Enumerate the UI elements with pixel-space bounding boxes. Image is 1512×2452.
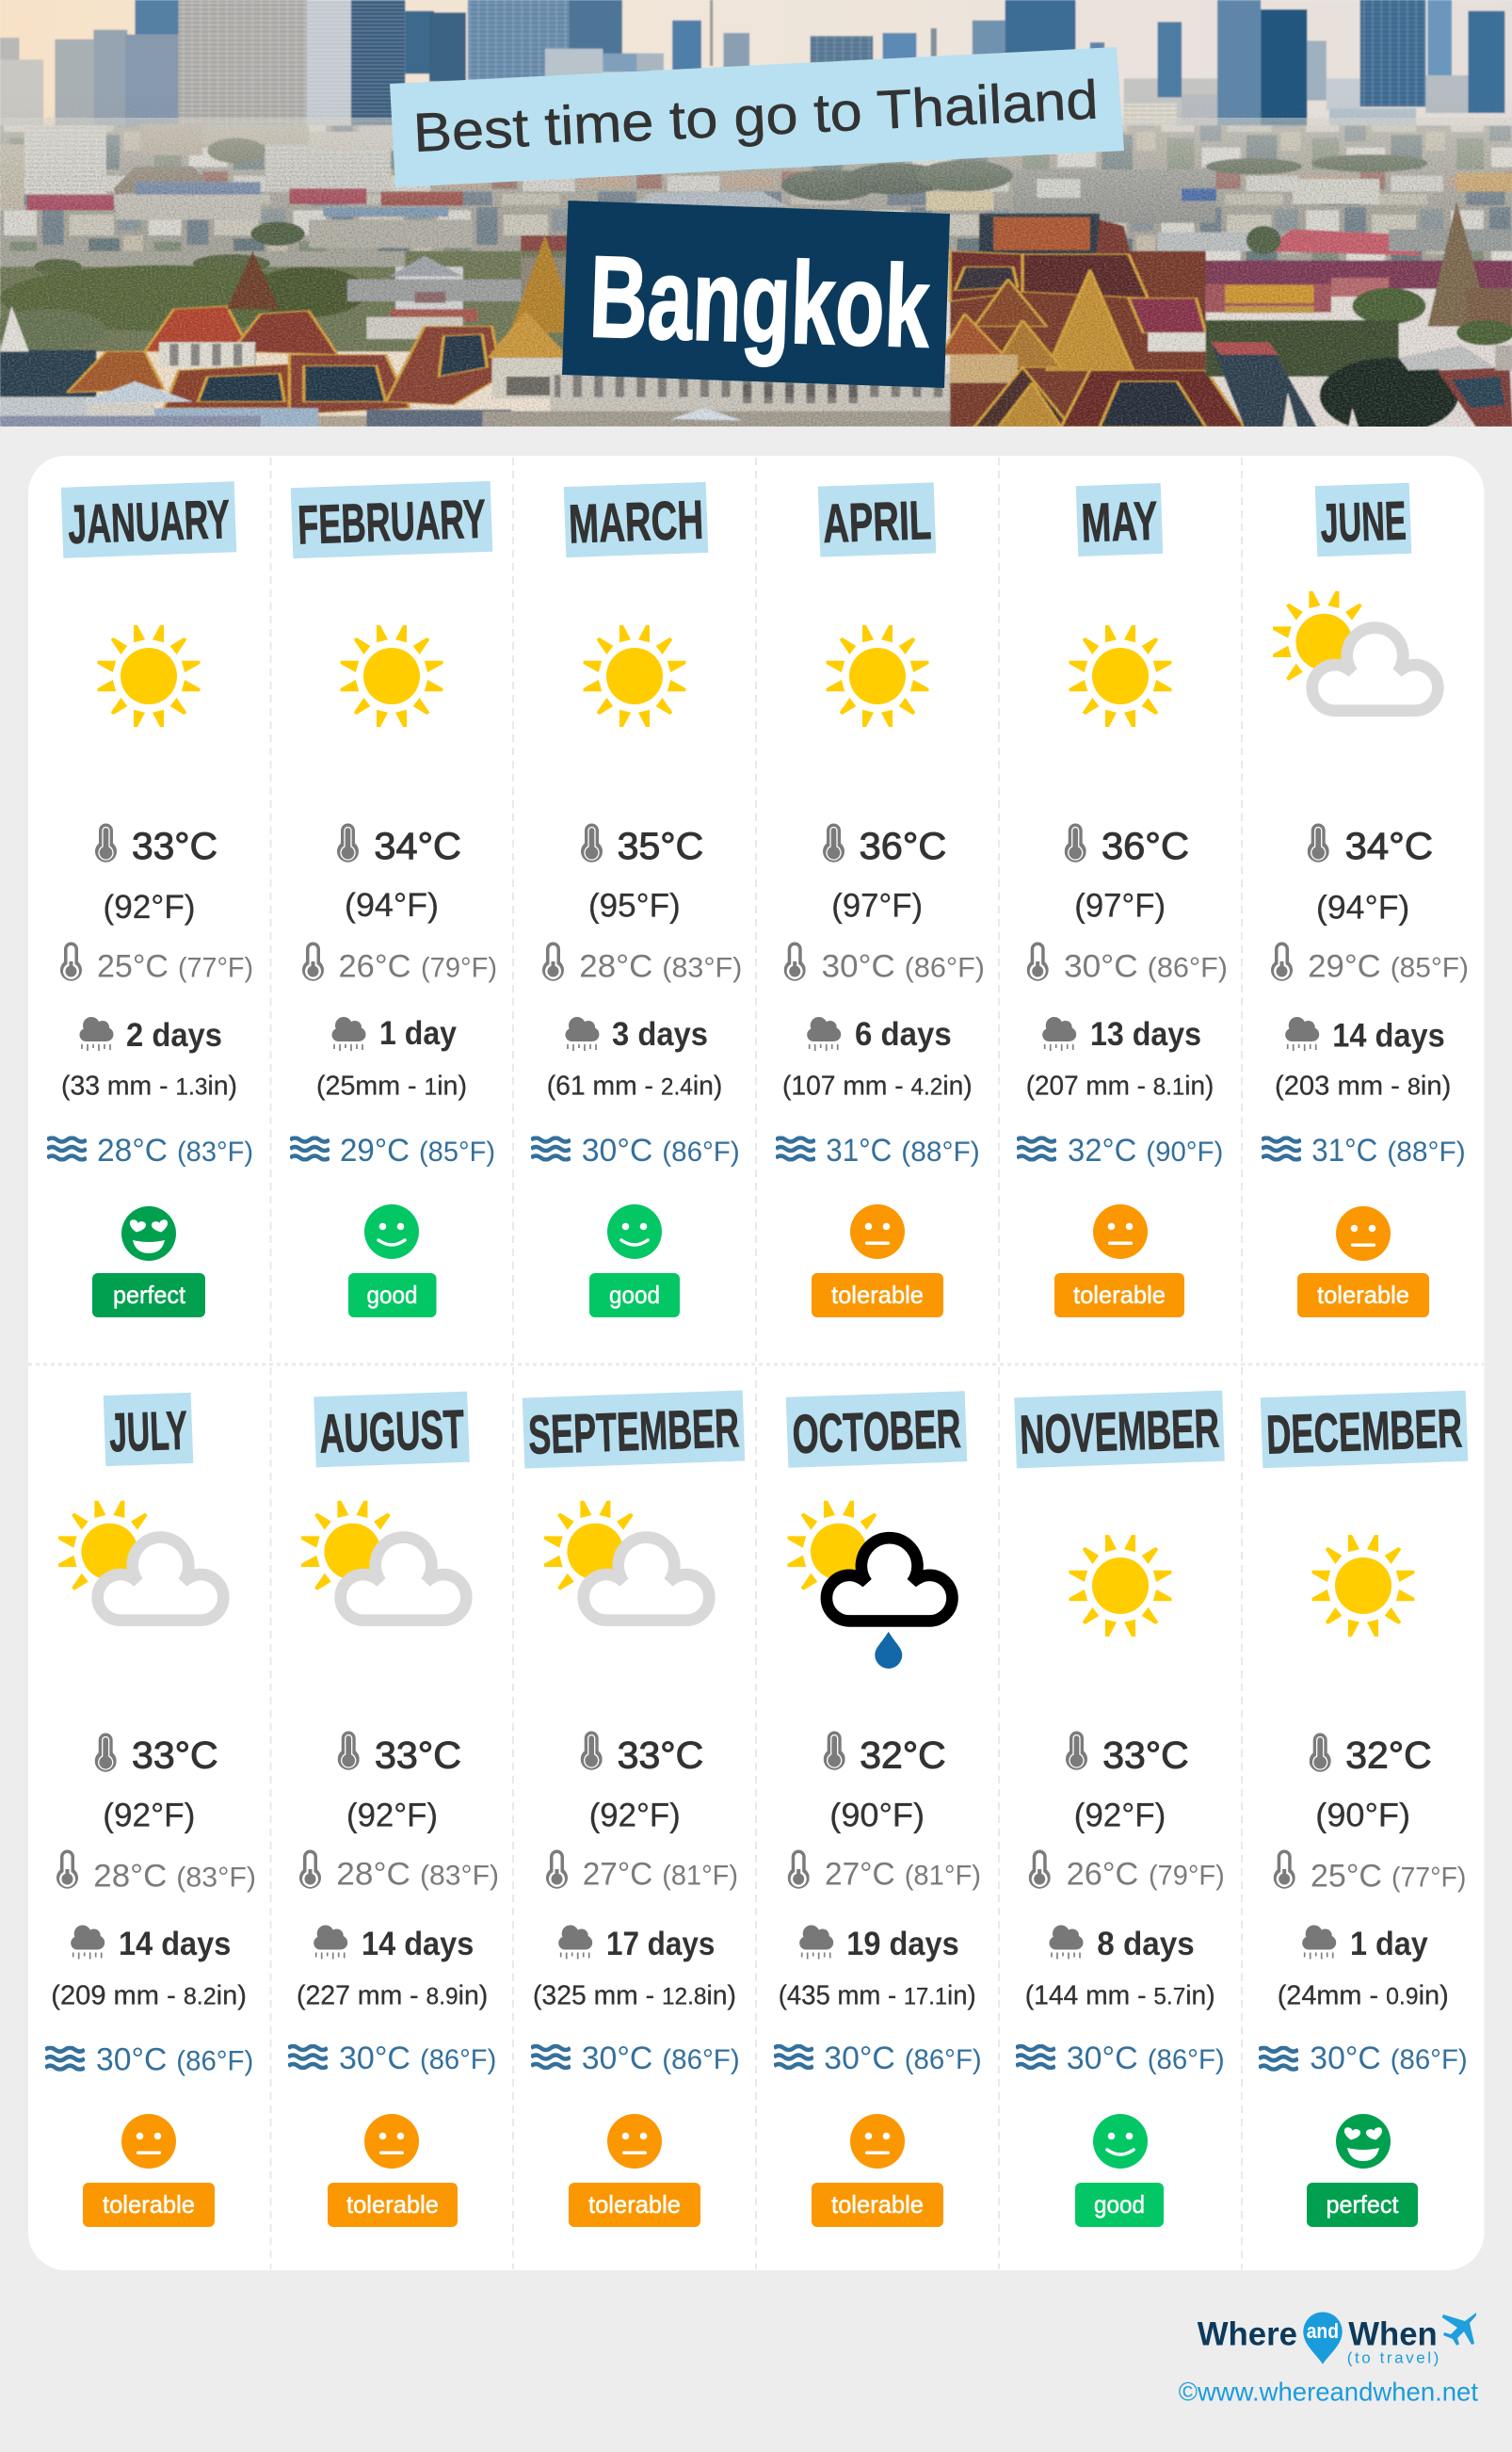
- rainy days: 14 days: [362, 1926, 474, 1962]
- rainfall: (24mm - 0.9in): [1278, 1980, 1449, 2010]
- icon: thermometer low: [299, 1849, 321, 1889]
- icon: rain: [1049, 1925, 1083, 1959]
- heading: April: APRIL: [822, 490, 932, 555]
- rating badge: tolerable: tolerable: [1073, 1281, 1166, 1309]
- icon: thermometer high: [581, 1731, 603, 1770]
- low temperature: 27°C: [583, 1857, 652, 1893]
- rating badge: tolerable: [812, 1273, 943, 1317]
- sea temperature: 30°C: [1310, 2041, 1381, 2076]
- sea temperature: [1067, 2041, 1225, 2076]
- rating badge: tolerable: [1054, 1273, 1184, 1317]
- sea temperature: (88°F): [901, 1137, 980, 1168]
- month: January: [47, 481, 253, 1317]
- high temperature: 36°C: [860, 826, 946, 867]
- icon: tolerable face: [1336, 1206, 1391, 1261]
- low temperature: 30°C: [1064, 949, 1138, 985]
- icon: thermometer low: [784, 942, 806, 981]
- rating badge: good: good: [367, 1281, 418, 1309]
- heading: February: [291, 481, 492, 558]
- sea temperature: [1068, 1133, 1223, 1169]
- low temperature: [1311, 1859, 1466, 1895]
- high temperature Fahrenheit: (90°F): [829, 1797, 925, 1833]
- rating badge: tolerable: [1297, 1273, 1429, 1317]
- rainy days: 3 days: [612, 1016, 708, 1053]
- icon: sea waves: [1262, 1137, 1301, 1160]
- icon: thermometer low: [1027, 942, 1049, 981]
- icon: rain: [79, 1017, 113, 1051]
- icon: good face: [607, 1204, 662, 1259]
- month: October: [774, 1391, 982, 2227]
- rainy days: 13 days: [1090, 1016, 1201, 1053]
- icon: sea waves: [1259, 2048, 1298, 2070]
- low temperature: 26°C: [1067, 1857, 1138, 1893]
- icon: thermometer high: [1308, 823, 1329, 863]
- website credit: ©www.whereandwhen.net: [1179, 2377, 1478, 2406]
- rating badge: perfect: [92, 1273, 205, 1317]
- sea temperature: [582, 1133, 740, 1169]
- icon: rain: [1302, 1925, 1336, 1959]
- low temperature: 29°C: [1308, 949, 1381, 985]
- icon: thermometer high: [1066, 1731, 1087, 1770]
- title label: Best time to go to Thailand: Best time to go to Thailand: [411, 69, 1100, 164]
- sea temperature: [1310, 2041, 1468, 2076]
- icon: sea waves: [531, 2046, 571, 2068]
- heading: October: OCTOBER: [792, 1398, 962, 1465]
- rainy days: 14 days: [119, 1926, 231, 1962]
- icon: tolerable face: [121, 2114, 176, 2169]
- low temperature: [97, 949, 253, 985]
- icon: thermometer low: [788, 1849, 810, 1889]
- sea temperature: 30°C: [96, 2042, 167, 2078]
- logo: Where and When (to travel): Where: [1198, 2316, 1297, 2353]
- sea temperature: 30°C: [582, 2041, 652, 2076]
- logo: Where and When (to travel): When: [1348, 2316, 1438, 2353]
- icon: map pin with and: [1303, 2312, 1343, 2364]
- icon: sunny: [98, 625, 200, 727]
- rating badge: tolerable: [569, 2183, 700, 2227]
- low temperature: 28°C: [336, 1857, 410, 1893]
- sea temperature: (85°F): [419, 1137, 495, 1168]
- low temperature: (85°F): [1391, 953, 1469, 984]
- sea temperature: 30°C: [339, 2041, 410, 2076]
- icon: sun behind cloud: [58, 1501, 223, 1621]
- rainy days: 8 days: [1097, 1926, 1195, 1962]
- sea temperature: (86°F): [662, 2044, 740, 2075]
- logo: Where and When (to travel): (to travel): [1347, 2348, 1439, 2366]
- high temperature: 33°C: [375, 1735, 461, 1777]
- rainfall: (61 mm - 2.4in): [547, 1072, 722, 1102]
- logo: Where and When (to travel): [1198, 2312, 1476, 2366]
- icon: rain: [1285, 1017, 1319, 1051]
- rainy days: 17 days: [606, 1926, 715, 1962]
- heading: May: [1076, 483, 1163, 557]
- high temperature Fahrenheit: (92°F): [1074, 1797, 1166, 1833]
- rating badge: good: good: [609, 1281, 660, 1309]
- sea temperature: (83°F): [177, 1137, 253, 1168]
- month: March: [531, 482, 742, 1317]
- heading: April: [818, 482, 936, 557]
- icon: thermometer low: [542, 942, 564, 981]
- icon: thermometer high: [338, 1731, 360, 1770]
- rainfall: (325 mm - 12.8in): [533, 1980, 736, 2010]
- rainy days: 19 days: [846, 1926, 959, 1962]
- sea temperature: (86°F): [1391, 2044, 1468, 2075]
- icon: thermometer low: [1029, 1849, 1051, 1889]
- icon: sea waves: [45, 2048, 85, 2070]
- high temperature: 34°C: [1345, 826, 1433, 867]
- icon: rain: [799, 1925, 833, 1959]
- icon: sunny: [1070, 625, 1171, 727]
- icon: thermometer low: [60, 942, 82, 981]
- icon: thermometer high: [823, 823, 844, 863]
- icon: sea waves: [1016, 2046, 1055, 2068]
- rating badge: tolerable: tolerable: [346, 2190, 439, 2218]
- low temperature: (83°F): [420, 1861, 499, 1892]
- heading: January: JANUARY: [67, 489, 231, 556]
- rainy days: 6 days: [855, 1016, 952, 1053]
- icon: thermometer low: [56, 1849, 78, 1889]
- heading: October: [786, 1391, 967, 1468]
- icon: sea waves: [531, 1137, 571, 1160]
- icon: rain: [71, 1925, 105, 1959]
- icon: thermometer high: [1065, 823, 1086, 863]
- month: November: [1014, 1391, 1225, 2227]
- rainfall: (107 mm - 4.2in): [782, 1072, 973, 1102]
- rating badge: perfect: perfect: [1326, 2190, 1399, 2218]
- heading: May: MAY: [1080, 491, 1159, 554]
- icon: sunny: [584, 625, 685, 727]
- low temperature: [583, 1857, 738, 1893]
- rainy days: 2 days: [126, 1017, 222, 1054]
- rainy days: 1 day: [1350, 1926, 1428, 1962]
- low temperature: (77°F): [1391, 1863, 1466, 1894]
- icon: rain: [558, 1925, 592, 1959]
- low temperature: (86°F): [1148, 953, 1228, 984]
- sea temperature: 28°C: [97, 1133, 168, 1169]
- icon: thermometer low: [546, 1849, 568, 1889]
- sea temperature: 31°C: [1311, 1133, 1377, 1169]
- icon: tolerable face: [607, 2114, 662, 2169]
- sea temperature: [340, 1133, 495, 1169]
- sea temperature: [97, 1133, 253, 1169]
- sea temperature: (90°F): [1146, 1137, 1223, 1168]
- icon: airplane: [1442, 2313, 1476, 2346]
- icon: rain: [314, 1925, 347, 1959]
- heading: March: [564, 482, 708, 557]
- rating badge: good: good: [1094, 2190, 1145, 2218]
- low temperature: (81°F): [905, 1861, 981, 1892]
- month: December: [1259, 1391, 1468, 2227]
- rainfall: (435 mm - 17.1in): [779, 1980, 976, 2010]
- icon: thermometer high: [95, 1733, 117, 1772]
- sea temperature: [96, 2042, 253, 2078]
- high temperature Fahrenheit: (92°F): [103, 1797, 195, 1833]
- sea temperature: (86°F): [662, 1137, 740, 1168]
- sea temperature: 30°C: [582, 1133, 652, 1169]
- icon: thermometer high: [1310, 1733, 1331, 1772]
- icon: sun behind cloud: [301, 1501, 466, 1621]
- high temperature: 33°C: [618, 1735, 703, 1777]
- icon: perfect face: [1336, 2114, 1391, 2169]
- heading: February: FEBRUARY: [297, 489, 487, 556]
- low temperature: 30°C: [822, 949, 895, 985]
- heading: June: JUNE: [1319, 490, 1407, 555]
- high temperature: 33°C: [132, 1735, 218, 1777]
- icon: sea waves: [774, 2046, 813, 2068]
- heading: January: [61, 481, 236, 558]
- high temperature: 36°C: [1102, 826, 1189, 867]
- rating badge: good: [589, 1273, 680, 1317]
- low temperature: (83°F): [176, 1863, 256, 1894]
- low temperature: (83°F): [662, 953, 742, 984]
- low temperature: [822, 949, 985, 985]
- month: June: [1262, 483, 1469, 1317]
- icon: thermometer low: [302, 942, 324, 981]
- icon: sea waves: [776, 1137, 815, 1160]
- rainfall: (227 mm - 8.9in): [297, 1980, 488, 2010]
- rainfall: (33 mm - 1.3in): [61, 1072, 237, 1102]
- low temperature: 25°C: [1311, 1859, 1382, 1895]
- icon: tolerable face: [364, 2114, 419, 2169]
- high temperature: 33°C: [132, 826, 217, 867]
- rating badge: tolerable: tolerable: [831, 1281, 924, 1309]
- rating badge: tolerable: tolerable: [103, 2190, 195, 2218]
- sea temperature: (86°F): [1148, 2044, 1225, 2075]
- icon: thermometer high: [95, 823, 117, 863]
- rating badge: good: [1075, 2183, 1164, 2227]
- high temperature Fahrenheit: (92°F): [104, 889, 196, 926]
- title label: Best time to go to Thailand: [390, 47, 1124, 187]
- icon: rain: [1042, 1017, 1076, 1051]
- low temperature: (86°F): [905, 953, 985, 984]
- sea temperature: 29°C: [340, 1133, 410, 1169]
- high temperature: 32°C: [860, 1735, 946, 1777]
- low temperature: 26°C: [339, 949, 410, 985]
- high temperature Fahrenheit: (94°F): [345, 887, 439, 924]
- icon: sea waves: [1017, 1137, 1056, 1160]
- icon: sea waves: [288, 2046, 328, 2068]
- sea temperature: 30°C: [824, 2041, 895, 2076]
- low temperature: 25°C: [97, 949, 169, 985]
- sea temperature: [339, 2041, 496, 2076]
- rating badge: tolerable: tolerable: [831, 2190, 924, 2218]
- sea temperature: 32°C: [1068, 1133, 1136, 1169]
- city label: Bangkok: [562, 201, 950, 388]
- month: August: [288, 1392, 499, 2227]
- sea temperature: [826, 1133, 980, 1169]
- heading: November: NOVEMBER: [1019, 1397, 1220, 1466]
- low temperature: [339, 949, 497, 985]
- icon: tolerable face: [1093, 1204, 1148, 1259]
- icon: rain: [565, 1017, 599, 1051]
- high temperature Fahrenheit: (92°F): [589, 1797, 681, 1833]
- icon: rain: [807, 1017, 841, 1051]
- rating badge: tolerable: [328, 2183, 458, 2227]
- high temperature Fahrenheit: (95°F): [588, 887, 681, 924]
- rating badge: perfect: [1307, 2183, 1418, 2227]
- sea temperature: (88°F): [1387, 1137, 1466, 1168]
- high temperature Fahrenheit: (94°F): [1316, 890, 1409, 927]
- icon: thermometer low: [1274, 1849, 1295, 1889]
- icon: sunny: [827, 625, 928, 727]
- icon: sea waves: [47, 1137, 87, 1160]
- rating badge: tolerable: [812, 2183, 943, 2227]
- icon: perfect face: [121, 1206, 176, 1261]
- icon: tolerable face: [850, 1204, 905, 1259]
- high temperature Fahrenheit: (97°F): [831, 887, 923, 924]
- panel: monthly weather card: [28, 456, 1484, 2270]
- rating badge: tolerable: tolerable: [588, 2190, 681, 2218]
- icon: tolerable face: [850, 2114, 905, 2169]
- heading: September: SEPTEMBER: [527, 1397, 740, 1466]
- month: April: [776, 482, 985, 1317]
- low temperature: [336, 1857, 499, 1893]
- high temperature Fahrenheit: (97°F): [1074, 887, 1166, 924]
- low temperature: [1308, 949, 1469, 985]
- icon: thermometer low: [1271, 942, 1293, 981]
- icon: thermometer high: [581, 823, 603, 863]
- icon: thermometer high: [337, 823, 359, 863]
- heading: September: [523, 1390, 745, 1469]
- heading: August: [314, 1392, 470, 1467]
- sea temperature: (86°F): [905, 2044, 982, 2075]
- sea temperature: 31°C: [826, 1133, 892, 1169]
- sea temperature: [582, 2041, 740, 2076]
- low temperature: [93, 1859, 256, 1895]
- rainfall: (144 mm - 5.7in): [1025, 1980, 1215, 2010]
- rainfall: (209 mm - 8.2in): [51, 1980, 247, 2010]
- icon: sea waves: [290, 1137, 330, 1160]
- month: May: [1017, 483, 1228, 1317]
- icon: sunny: [341, 625, 442, 727]
- high temperature: 34°C: [374, 826, 461, 867]
- month: September: [523, 1390, 745, 2227]
- low temperature: (81°F): [662, 1861, 738, 1892]
- sea temperature: [1311, 1133, 1466, 1169]
- rainy days: 1 day: [379, 1015, 457, 1052]
- month: July: [45, 1393, 256, 2227]
- icon: sun behind cloud: [544, 1501, 709, 1621]
- icon: thermometer high: [824, 1731, 845, 1770]
- high temperature Fahrenheit: (92°F): [346, 1797, 438, 1833]
- low temperature: [1067, 1857, 1225, 1893]
- sea temperature: (86°F): [420, 2044, 496, 2075]
- low temperature: [579, 949, 742, 985]
- rating badge: tolerable: [83, 2183, 215, 2227]
- low temperature: [1064, 949, 1228, 985]
- high temperature: 35°C: [618, 826, 703, 867]
- heading: March: MARCH: [568, 490, 704, 555]
- city label: Bangkok: Bangkok: [587, 233, 932, 372]
- high temperature: 32°C: [1345, 1735, 1432, 1777]
- heading: July: JULY: [108, 1400, 188, 1463]
- low temperature: 27°C: [825, 1857, 895, 1893]
- rainy days: 14 days: [1332, 1018, 1445, 1055]
- icon: sunny: [1070, 1535, 1171, 1637]
- icon: sunny: [1312, 1535, 1414, 1637]
- icon: sun behind rain cloud with drop: [788, 1501, 953, 1669]
- high temperature Fahrenheit: (90°F): [1315, 1797, 1410, 1833]
- banner photo: Bangkok skyline: [0, 0, 1512, 433]
- rating badge: perfect: perfect: [113, 1281, 186, 1309]
- heading: July: [104, 1393, 193, 1466]
- rating badge: good: [348, 1273, 437, 1317]
- sea temperature: 30°C: [1067, 2041, 1138, 2076]
- rainfall: (207 mm - 8.1in): [1026, 1072, 1214, 1102]
- sea temperature: [824, 2041, 982, 2076]
- sea temperature: (86°F): [176, 2046, 253, 2077]
- icon: rain: [331, 1017, 365, 1051]
- rating badge: tolerable: tolerable: [1317, 1281, 1409, 1309]
- heading: November: [1014, 1391, 1225, 1468]
- heading: June: [1315, 483, 1411, 557]
- low temperature: [825, 1857, 981, 1893]
- low temperature: (79°F): [1149, 1861, 1225, 1892]
- low temperature: 28°C: [93, 1859, 167, 1895]
- icon: map pin with and: and: [1307, 2319, 1339, 2343]
- icon: sun behind cloud: [1273, 591, 1438, 711]
- high temperature: 33°C: [1102, 1735, 1189, 1777]
- heading: August: AUGUST: [318, 1398, 465, 1465]
- icon: good face: [1093, 2114, 1148, 2169]
- rainfall: (25mm - 1in): [316, 1072, 467, 1102]
- low temperature: 28°C: [579, 949, 652, 985]
- low temperature: (79°F): [421, 953, 497, 984]
- rainfall: (203 mm - 8in): [1275, 1072, 1451, 1102]
- icon: good face: [364, 1204, 419, 1259]
- month: February: [290, 481, 497, 1317]
- low temperature: (77°F): [178, 953, 253, 984]
